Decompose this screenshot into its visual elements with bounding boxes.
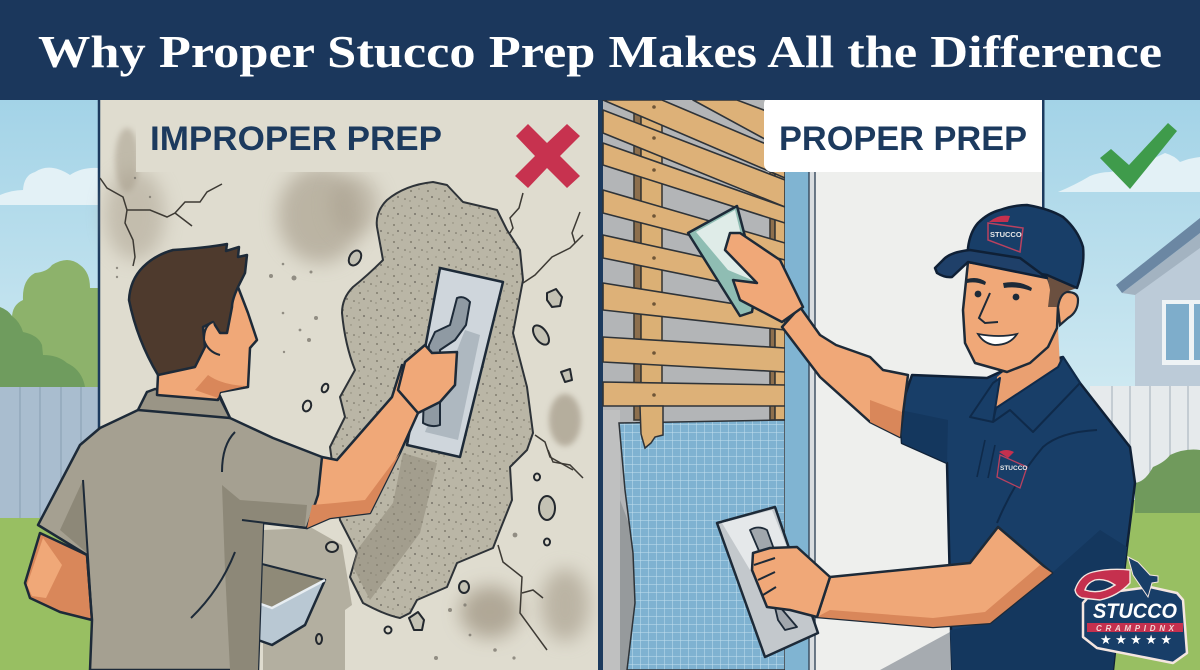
raised arm [782, 307, 908, 437]
debris rings [301, 383, 550, 644]
panel: improper prep wall [25, 100, 598, 670]
cracks [100, 178, 583, 650]
shadow wedge at base [880, 632, 950, 670]
cap logo: STUCCO [990, 230, 1022, 239]
left bushes [0, 260, 98, 390]
logo subtitle: CRAMPIDNX [1096, 624, 1175, 633]
raised hand [725, 233, 803, 322]
lower arm [817, 527, 1052, 627]
man: shirt fold lines [83, 432, 307, 620]
logo trowel [1128, 557, 1158, 597]
cap [935, 205, 1083, 288]
man: neck shadow [195, 375, 246, 398]
sponge [688, 206, 757, 316]
man: right forearm [307, 365, 418, 528]
logo name: STUCCO [1093, 600, 1177, 623]
right bush [1135, 450, 1200, 513]
trowel: improper [407, 268, 503, 457]
panel divider [598, 100, 603, 670]
man: shirt [38, 392, 325, 670]
dust specks [116, 177, 517, 660]
man: ear [204, 322, 220, 355]
jagged stud end [640, 406, 663, 448]
placket [977, 440, 995, 478]
mesh shadow [620, 500, 640, 670]
patched stucco blob [330, 182, 533, 618]
man: left forearm [25, 533, 92, 620]
man: hair [129, 244, 247, 375]
raised arm shadow [870, 400, 902, 437]
trowel: proper [717, 507, 818, 657]
right fence [1090, 386, 1200, 490]
shirt seam [994, 377, 1097, 523]
right cloud [1058, 153, 1200, 192]
shadow cast by worker on wall [263, 528, 352, 670]
mixing tray [258, 563, 325, 645]
lower arm shadow [817, 565, 1052, 627]
left grass [0, 518, 98, 670]
left cloud [0, 168, 98, 205]
debris chunks [326, 248, 572, 630]
cap logo [988, 216, 1023, 252]
panel: right backyard background [1044, 100, 1200, 670]
logo red band [1087, 623, 1183, 632]
logo: stucco champions badge [1075, 557, 1187, 663]
neck [994, 328, 1060, 420]
wood lath strips [603, 100, 785, 406]
face [963, 262, 1058, 372]
panel: left backyard background [0, 100, 100, 670]
ear [1058, 292, 1078, 325]
white finished wall [809, 172, 1042, 670]
logo swoosh [1075, 569, 1130, 600]
proper prep label [764, 96, 1040, 172]
shirt badge: STUCCO [1000, 465, 1027, 472]
man: forearm shadow [307, 453, 400, 528]
wall stains [105, 128, 589, 641]
wood nails [652, 105, 656, 397]
clean area behind heading [136, 100, 516, 172]
man: hand [398, 345, 457, 413]
studs [634, 100, 785, 420]
heading: improper prep: IMPROPER PREP [150, 120, 442, 158]
wall edge [1042, 100, 1044, 220]
house [1116, 218, 1200, 386]
man: shirt shadows [60, 480, 307, 670]
hair side [1047, 275, 1077, 307]
eyes and brows [967, 278, 1032, 300]
sheathing lower left [603, 410, 620, 670]
panel: proper prep wall [603, 96, 1042, 670]
icon: green check [1100, 123, 1177, 189]
shaded lower patch [353, 453, 437, 600]
right grass [1044, 500, 1200, 670]
logo stars: ★★★★★ [1100, 632, 1172, 647]
shirt collar [970, 357, 1080, 432]
shirt badge [997, 450, 1027, 488]
worker shirt shadows [900, 410, 1127, 670]
icon: red x [515, 124, 580, 188]
heading: proper prep: PROPER PREP [779, 120, 1027, 158]
header bar [0, 0, 1200, 100]
man: neck and face [157, 287, 257, 400]
worker: proper prep [688, 205, 1135, 670]
left fence [0, 387, 98, 518]
nose [979, 293, 998, 323]
mesh panel [619, 420, 785, 670]
smile [978, 334, 1017, 345]
lower hand fingers [754, 558, 776, 595]
blue strip [785, 172, 809, 670]
man: collar [138, 389, 230, 418]
man: left forearm highlight [27, 538, 62, 598]
title: Why Proper Stucco Prep Makes All the Difference [38, 26, 1162, 77]
lower hand [752, 547, 830, 617]
worker shirt [900, 357, 1135, 670]
